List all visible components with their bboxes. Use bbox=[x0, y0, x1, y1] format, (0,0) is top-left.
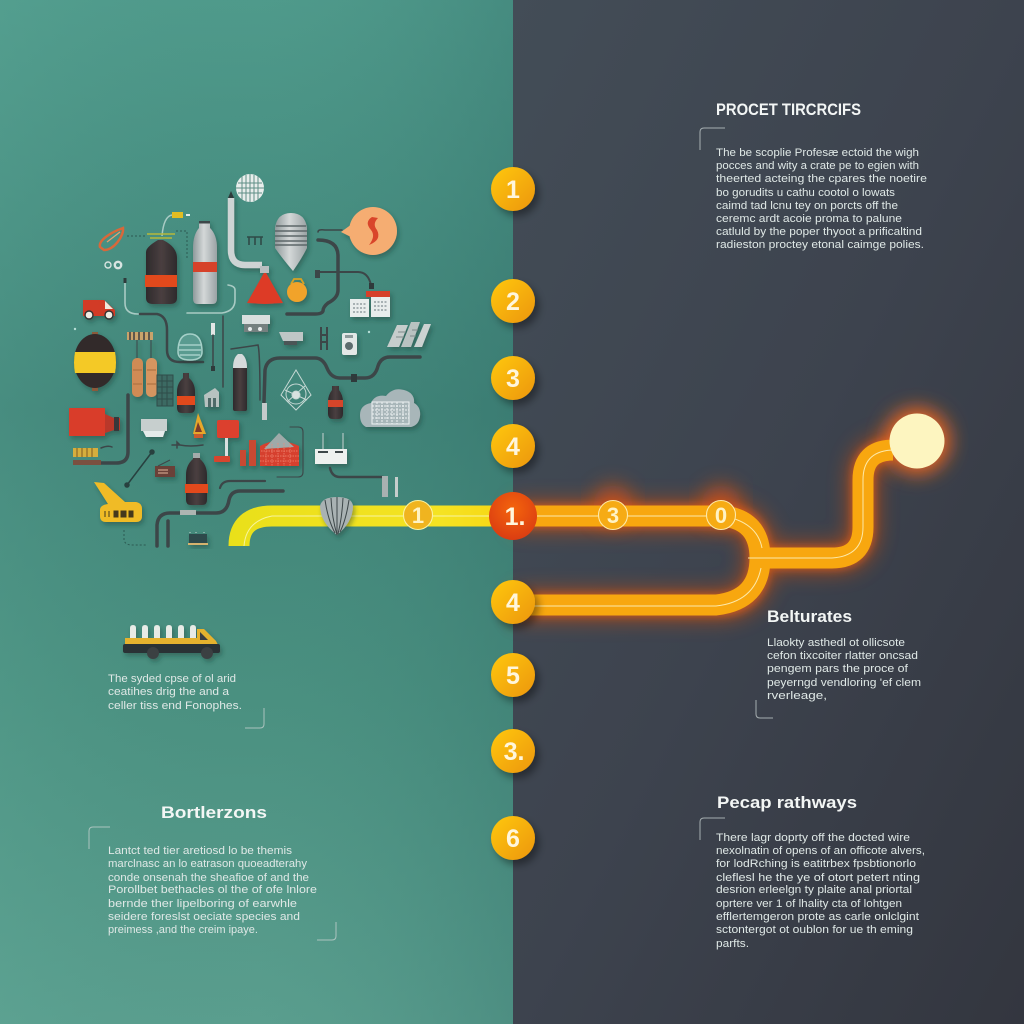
icon: red box with stem bbox=[214, 420, 239, 462]
text block: Belturates: Llaokty asthedl ot ollicsote bbox=[767, 637, 905, 649]
icon: barcode strip bbox=[127, 332, 153, 340]
icon: cloud grid bbox=[360, 389, 420, 427]
step marker: 4 bbox=[491, 424, 535, 468]
step marker: 2 bbox=[491, 279, 535, 323]
icon: silver box unit bbox=[242, 315, 270, 332]
bracket: truck caption bbox=[245, 708, 264, 728]
panel: left teal background bbox=[0, 0, 513, 1024]
pipeline: yellow segment bbox=[239, 516, 513, 546]
text block: Belturates: rverleage, bbox=[767, 690, 827, 702]
text block: top right: The be scoplie Profesæ ectoid the wigh bbox=[716, 147, 919, 159]
text block: top right: radieston proctey etonal caimge polies. bbox=[716, 239, 924, 251]
icon: turquoise dome bbox=[178, 334, 202, 360]
text block: truck caption bbox=[108, 673, 242, 712]
icon: red mesh dome bbox=[260, 433, 299, 466]
icon: white bent pipe bbox=[228, 191, 262, 265]
icon: glowing end bulb bbox=[890, 414, 944, 468]
text block: Belturates: pengem pars the proce of bbox=[767, 663, 909, 675]
text block: Pecap rathways: There lagr doprty off the docted wire bbox=[716, 832, 910, 844]
icon: radio bbox=[155, 460, 175, 477]
text block: bottom left: preimess ,and the creim ipaye. bbox=[108, 924, 258, 936]
glow: pipeline halo bbox=[395, 409, 949, 605]
bracket: top right text bbox=[700, 128, 725, 150]
text block: bottom left: conde onsenah the sheafioe of and the bbox=[108, 872, 309, 884]
text block: Pecap rathways: desrion erleelgn ty plaite anal priortal bbox=[716, 884, 912, 896]
connector: thin line over tall bottle bbox=[231, 345, 260, 400]
connector: dashed bottle line bbox=[176, 231, 187, 258]
connector: small wire bbox=[172, 442, 203, 448]
pipeline node: 3: 3 bbox=[607, 503, 619, 528]
pipeline node: 3 bbox=[598, 500, 628, 530]
icon: arrow rod bbox=[125, 450, 154, 487]
icon: black and yellow sphere tank bbox=[74, 332, 116, 391]
step marker: 4 lower bbox=[491, 580, 535, 624]
icon: yellow valve connector bbox=[147, 212, 190, 238]
pipeline node: 1 on yellow bbox=[404, 500, 432, 530]
icon: dots bbox=[74, 328, 370, 333]
icon: orange twin capsules bbox=[132, 340, 157, 397]
connector: main dark pipe bbox=[262, 357, 420, 420]
panel: right dark background bbox=[513, 0, 1024, 1024]
connector: thin light pipe with dark run bbox=[124, 278, 235, 387]
step marker: 5 bbox=[491, 653, 535, 697]
pipeline node: 0: 0 bbox=[715, 503, 727, 528]
icon: mesh disc bbox=[236, 174, 264, 202]
step marker: 6 bbox=[491, 816, 535, 860]
icon: small device bbox=[279, 332, 303, 345]
connector: left dark pipe bbox=[75, 395, 128, 463]
text block: Pecap rathways: for lodRching is eatitrbex fpsbtionorlo bbox=[716, 858, 916, 870]
icon: tall bottle bbox=[233, 354, 247, 411]
step marker: 3: 3 bbox=[506, 365, 520, 393]
text block: bottom left bbox=[108, 845, 317, 936]
text block: Pecap rathways bbox=[716, 832, 925, 950]
step marker: 4: 4 bbox=[506, 433, 520, 461]
icon: tiny house bbox=[204, 388, 219, 407]
icon: small red bottle bbox=[328, 386, 343, 419]
icon: yellow grid plate bbox=[73, 446, 112, 465]
icon: chip bbox=[188, 532, 208, 544]
text block: Pecap rathways: efflertemgeron prote as carle onlclgint bbox=[716, 911, 919, 923]
text block: top right: caimd tad lcnu tey on porcts off the bbox=[716, 200, 898, 212]
icon: washing unit bbox=[342, 333, 357, 355]
text block: Pecap rathways: sctontergot ot oublon for ue th eming bbox=[716, 924, 913, 936]
icon: red bars bbox=[240, 440, 256, 466]
text block: Belturates: cefon tixcoiter rlatter oncsad bbox=[767, 650, 918, 662]
step marker: 6: 6 bbox=[506, 825, 520, 853]
text block: bottom left: Porollbet bethacles ol the of ofe lnlore bbox=[108, 884, 317, 896]
connector: lower pipes bbox=[157, 481, 283, 546]
connector: upper right dark pipes bbox=[287, 230, 371, 314]
text block: top right: catluld by the poper thyoot a prificaltind bbox=[716, 226, 922, 238]
text block: top right: ceremc ardt acoie proma to palune bbox=[716, 213, 902, 225]
step marker: 1 bbox=[491, 167, 535, 211]
icon: dark tower bbox=[320, 327, 328, 350]
text block: truck caption: ceatihes drig the and a bbox=[108, 686, 230, 698]
step marker: 5: 5 bbox=[506, 662, 520, 690]
text block: truck caption: The syded cpse of ol arid bbox=[108, 673, 236, 685]
icon: dark grid panel bbox=[157, 375, 173, 406]
icon: orange kettlebell bbox=[287, 279, 307, 302]
icon: striped shield valve bbox=[320, 497, 353, 535]
icon: yellow crane bbox=[94, 482, 142, 522]
pipeline: orange upper branch, lower branch and outlet bbox=[513, 450, 893, 606]
icon: silver panels bbox=[387, 322, 431, 347]
pipeline node: 0 bbox=[706, 500, 736, 530]
step marker: 4 lower: 4 bbox=[506, 589, 520, 617]
text block: top right: pocces and wity a crate pe to egien with bbox=[716, 160, 919, 172]
text block: truck caption: celler tiss end Fonophes. bbox=[108, 700, 242, 712]
icon: orange speech bubble bbox=[341, 207, 397, 255]
text block: Belturates bbox=[767, 637, 921, 702]
connector: calendar plug bbox=[369, 283, 374, 289]
icon: red box with funnel bbox=[69, 408, 120, 436]
step marker: 3. bbox=[491, 729, 535, 773]
text block: top right: theerted acteing the cpares the noetire bbox=[716, 173, 927, 185]
icon: orange cone bbox=[193, 413, 206, 438]
heading: Pecap rathways: Pecap rathways bbox=[717, 793, 857, 812]
text block: bottom left: bernde ther lipelboring of earwhle bbox=[108, 898, 297, 910]
bracket: Pecap rathways bbox=[700, 818, 725, 840]
bracket: Belturates bbox=[756, 700, 773, 718]
icon: small washers bbox=[105, 262, 121, 268]
connector: wire around dome bbox=[277, 427, 303, 477]
icon: silver gas cylinder bbox=[193, 221, 217, 304]
icon: ribbed silver capsule bbox=[275, 213, 307, 271]
text block: Pecap rathways: nexolnatin of opens of an officote alvers, bbox=[716, 845, 925, 857]
text block: Pecap rathways: parfts. bbox=[716, 938, 749, 950]
text block: bottom left: marclnasc an lo eatrason quoeadterahy bbox=[108, 858, 308, 870]
pipeline node: 1 on yellow: 1 bbox=[412, 503, 424, 528]
connector: dashed wrench line bbox=[127, 235, 147, 237]
icon: wrench ring bbox=[100, 228, 123, 250]
text block: top right: bo gorudits u cathu cootol o lowats bbox=[716, 187, 896, 199]
step marker: red active 1.: 1. bbox=[505, 503, 525, 531]
text block: bottom left: seidere foreslst oeciate species and bbox=[108, 911, 300, 923]
icon: red truck bbox=[83, 300, 115, 319]
step marker: 1: 1 bbox=[506, 176, 520, 204]
icon: yellow bottle truck bbox=[123, 625, 220, 659]
heading: Belturates: Belturates bbox=[767, 607, 852, 626]
step marker: 3 bbox=[491, 356, 535, 400]
connector: dashed chip line bbox=[124, 530, 147, 545]
icon: wire diamond bbox=[281, 370, 311, 410]
icon: calendar bbox=[350, 291, 390, 317]
icon: white box bbox=[141, 419, 167, 437]
heading: PROCET TIRCRCIFS: PROCET TIRCRCIFS bbox=[716, 100, 861, 119]
icon: glyph bbox=[247, 237, 263, 245]
icon: small dark bottle bbox=[177, 373, 195, 413]
icon: router bbox=[315, 433, 347, 464]
connector: router pipe and cylinders bbox=[330, 468, 398, 497]
icon: dark gas cylinder bbox=[145, 240, 177, 304]
icon: lower dark bottle bbox=[185, 453, 208, 505]
icon: red pyramid funnel bbox=[247, 266, 283, 304]
text block: Belturates: peyerngd vendloring 'ef clem bbox=[767, 677, 921, 689]
text block: Pecap rathways: oprtere ver 1 of lhality cta of lohtgen bbox=[716, 898, 902, 910]
bracket: bottom left lower corner bbox=[317, 922, 336, 940]
icon cluster: industrial equipment bbox=[69, 174, 431, 546]
bracket: bottom left top corner bbox=[89, 827, 110, 849]
text block: Pecap rathways: cleflesl he the ye of otort petert nting bbox=[716, 872, 920, 884]
step marker: 3.: 3. bbox=[504, 738, 524, 766]
step marker: red active 1. bbox=[489, 492, 537, 540]
text block: top right bbox=[716, 147, 927, 251]
text block: bottom left: Lantct ted tier aretiosd lo be themis bbox=[108, 845, 293, 857]
heading: Bortlerzons: Bortlerzons bbox=[161, 803, 267, 822]
step marker: 2: 2 bbox=[506, 288, 520, 316]
